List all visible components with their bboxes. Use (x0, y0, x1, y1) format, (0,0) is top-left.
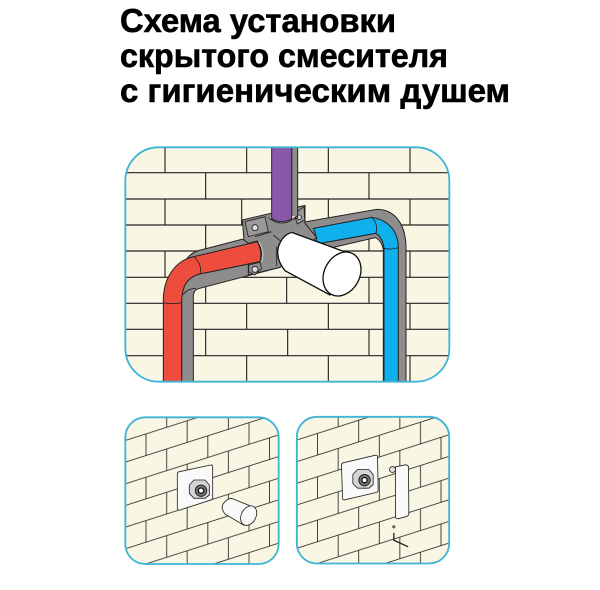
purple riser pipe (272, 145, 292, 222)
grey conduit: right (297, 209, 406, 383)
panel: finished installation (297, 417, 449, 563)
cold water pipe (313, 217, 398, 383)
pipe joint lines (163, 217, 398, 304)
mounting plate (242, 205, 317, 275)
valve fitting (353, 469, 373, 488)
cover plate (177, 465, 213, 510)
valve fitting (189, 480, 209, 498)
white cylinder (277, 232, 362, 297)
collar (268, 216, 297, 223)
title: Схема установки (120, 2, 396, 39)
hygienic shower stub (389, 466, 395, 472)
title (120, 2, 510, 109)
handle bar (395, 465, 409, 519)
panel: wall plate and sleeve (125, 417, 279, 564)
hot water pipe (163, 242, 261, 383)
panel border (125, 147, 449, 382)
hot pipe end highlight (259, 242, 263, 262)
panel border (297, 417, 449, 563)
title: скрытого смесителя (120, 37, 448, 74)
cover plate (341, 455, 378, 500)
valve hub shading lines (245, 207, 305, 266)
grey conduit: left (182, 237, 280, 383)
screws (249, 215, 301, 275)
grey strip beside riser (292, 145, 298, 218)
panel: main pipe diagram (120, 145, 453, 383)
title: с гигиеническим душем (120, 72, 510, 109)
hex key (394, 533, 408, 547)
screw dot (392, 525, 395, 528)
sleeve cylinder (222, 498, 260, 528)
panel border (125, 417, 279, 564)
